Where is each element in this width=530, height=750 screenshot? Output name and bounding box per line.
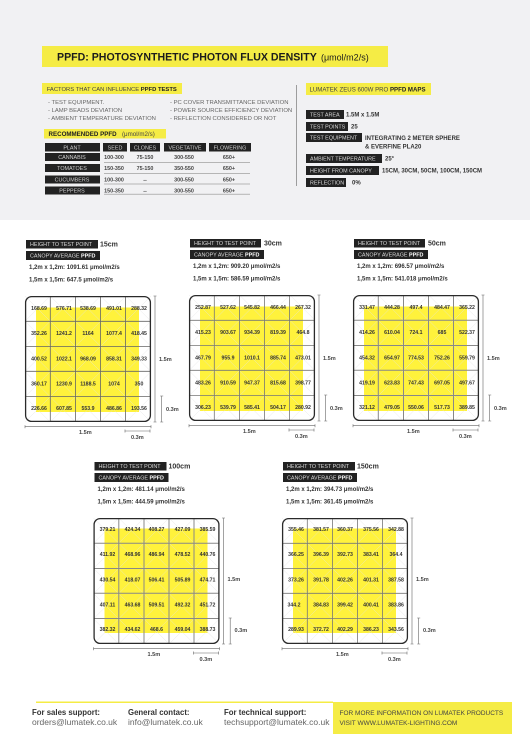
spec: test points [306,122,358,131]
table rows: PEPPERS [59,188,85,194]
title: (μmol/m2/s) [321,52,369,62]
table rows: 300-550 [174,188,194,194]
values: 478.52 [175,552,191,558]
text: averages [98,487,186,506]
values: 459.04 [175,627,191,633]
table rows: -- [143,177,147,183]
text: averages: 1,2m x 1,2m: 909.20 μmol/m2/s [193,264,281,270]
spec: test area: 1.5M x 1.5M [346,113,379,119]
values: 365.22 [459,305,475,311]
values: 331.47 [359,305,375,311]
values: 576.71 [56,306,72,312]
table rows: 350-550 [174,166,194,172]
label: height: HEIGHT TO TEST POINT [98,464,161,470]
values: 392.73 [337,552,353,558]
values: 1022.1 [56,356,72,362]
values: 1164 [82,331,94,337]
label: height [354,239,446,248]
values: 379.21 [100,527,116,533]
values: 267.32 [295,305,311,311]
table rows: 300-550 [174,177,194,183]
values: 444.28 [384,305,400,311]
label: height: 100cm [168,464,190,470]
values: 389.85 [459,405,475,411]
heat map grid [189,295,315,421]
values: 360.17 [31,382,47,388]
values: 424.34 [125,527,141,533]
label: height: HEIGHT TO TEST POINT [194,241,257,247]
table rows: CANNABIS [58,155,86,161]
values: 463.68 [125,602,141,608]
values: 193.56 [131,406,147,412]
dimensions: 1.5m [487,356,500,362]
values: 497.67 [459,380,475,386]
text: factors left: - LAMP BEADS DEVIATION [48,108,122,114]
panel: header background [0,0,530,220]
text: factors right: - REFLECTION CONSIDERED OR NOT [170,116,277,122]
values: 402.29 [337,627,353,633]
label: height: 50cm [428,240,446,248]
label: height: 150cm [357,464,379,470]
spec: test equipment [306,133,460,150]
values: 375.56 [363,527,379,533]
values: 466.44 [270,305,286,311]
dimensions: 1.5m [407,429,420,435]
values: 468.6 [150,627,163,633]
label: canopy average: CANOPY AVERAGE PPFD [30,254,96,260]
text: averages: 1,2m x 1,2m: 696.57 μmol/m2/s [357,264,445,270]
spec: reflection: REFLECTION [310,180,344,186]
text: factors left: - TEST EQUIPMENT. [48,100,104,106]
values: 1010.1 [244,356,260,362]
values: 440.76 [200,552,216,558]
label: height [190,239,282,248]
values: 553.9 [82,406,95,412]
values: 408.27 [149,527,165,533]
heading: factors: FACTORS THAT CAN INFLUENCE PPFD TESTS [47,87,177,93]
values: 414.26 [359,330,375,336]
values: 607.85 [56,406,72,412]
values: 747.43 [408,380,424,386]
dimensions: 1.5m [416,577,429,583]
table header: FLOWERING [214,145,246,151]
values: 473.01 [295,356,311,362]
heading: recommended [44,129,166,138]
values: 252.87 [195,305,211,311]
text: factors left: - AMBIENT TEMPERATURE DEVIATION [48,116,156,122]
heat map grid [94,518,220,644]
heat map grid [282,518,408,644]
values: 383.41 [363,552,379,558]
text: averages [286,487,374,506]
values: 1230.9 [56,382,72,388]
values: 288.32 [131,306,147,312]
values [288,527,404,633]
spec: test points: TEST POINTS [310,124,346,130]
values: 903.67 [220,330,236,336]
values: 947.37 [244,380,260,386]
values: 418.07 [125,578,141,584]
values: 387.58 [388,578,404,584]
panel: recommended PPFD [44,129,251,195]
values: 509.51 [149,602,165,608]
label: canopy average [26,251,100,260]
values [31,306,147,412]
spec: test points: 25 [351,125,358,131]
contact: general: General contact: [128,708,190,717]
panel: test specifications [296,83,482,187]
values: 968.09 [80,356,96,362]
label: canopy average: CANOPY AVERAGE PPFD [287,476,353,482]
table rows: 650+ [223,155,235,161]
values: 372.72 [313,627,329,633]
values: 388.73 [200,627,216,633]
values [100,527,216,633]
values: 366.25 [288,552,304,558]
spec: height from canopy: HEIGHT FROM CANOPY [310,168,372,174]
values: 486.86 [106,406,122,412]
panel: map 100cm [94,462,247,663]
text: averages: 1,2m x 1,2m: 1091.61 μmol/m2/s [29,265,120,271]
values: 819.39 [270,330,286,336]
dimensions: 0.3m [459,434,472,440]
values: 559.79 [459,356,475,362]
values: 1077.4 [106,331,122,337]
heading: factors [42,83,182,94]
dimensions: 1.5m [148,652,160,658]
label: canopy average [354,250,428,259]
label: canopy average: CANOPY AVERAGE PPFD [194,252,260,258]
values: 468.96 [125,552,141,558]
dimensions: 0.3m [166,407,179,413]
values: 539.79 [220,405,236,411]
table header [45,143,251,152]
values: 386.23 [363,627,379,633]
dimensions [282,518,436,663]
dimensions: 0.3m [494,406,507,412]
values: 752.26 [434,356,450,362]
values: 474.71 [200,578,216,584]
values: 934.39 [244,330,260,336]
label: height [283,462,379,470]
dimensions [189,295,343,440]
values: 467.79 [195,356,211,362]
dimensions [25,296,179,441]
dimensions: 0.3m [131,435,144,441]
heading: maps: LUMATEK ZEUS 600W PRO PPFD MAPS [310,86,426,94]
table rows: 75-150 [137,155,153,161]
values: 724.1 [410,330,423,336]
table rows: 150-350 [104,188,124,194]
spec: ambient temperature: 25° [385,157,395,163]
values: 401.31 [363,578,379,584]
values: 538.69 [80,306,96,312]
spec: height from canopy: 15CM, 30CM, 50CM, 100CM, 150CM [382,169,482,175]
values: 350 [135,382,143,388]
contact: sales: For sales support: [32,708,100,717]
label: height: HEIGHT TO TEST POINT [287,464,350,470]
text: averages: 1,5m x 1,5m: 541.018 μmol/m2/s [357,277,448,283]
values: 506.41 [149,578,165,584]
values: 451.72 [200,602,216,608]
heading: maps [306,83,431,95]
label: height: 15cm [100,242,118,248]
table rows: 650+ [223,188,235,194]
dimensions: 1.5m [79,430,92,436]
values: 522.37 [459,330,475,336]
values: 280.92 [295,405,311,411]
values: 226.66 [31,406,47,412]
table rows [45,153,250,195]
text: factors right [170,100,292,122]
dimensions: 0.3m [295,434,308,440]
values: 168.69 [31,306,47,312]
values: 505.89 [175,578,191,584]
values: 321.12 [359,405,375,411]
values: 398.77 [295,380,311,386]
table rows: 650+ [223,177,235,183]
values: 497.4 [410,305,423,311]
values: 352.26 [31,331,47,337]
table rows: 100-300 [104,155,124,161]
values: 360.37 [337,527,353,533]
contact: technical [224,708,330,727]
label: height: HEIGHT TO TEST POINT [30,242,93,248]
values: 419.19 [359,380,375,386]
label: height: HEIGHT TO TEST POINT [358,241,421,247]
dimensions [353,295,507,440]
text: factors left [48,100,156,122]
dimensions: 1.5m [323,356,336,362]
values: 517.73 [434,405,450,411]
panel: map 150cm [282,462,436,663]
label: canopy average [94,473,168,482]
table header: SEED [108,145,122,151]
values: 418.45 [131,331,147,337]
contact: general: info@lumatek.co.uk [128,717,204,727]
spec: height from canopy [306,166,482,175]
values: 885.74 [270,356,286,362]
values: 399.42 [337,602,353,608]
dimensions: 0.3m [200,657,212,663]
dimensions [94,518,247,663]
contact: technical: For technical support: [224,708,306,717]
label: canopy average [190,250,264,259]
values: 545.82 [244,305,260,311]
values: 382.32 [100,627,116,633]
values: 411.92 [100,552,115,558]
values: 1241.2 [56,331,72,337]
footer [32,702,512,734]
label: canopy average [283,473,357,482]
text: factors right: - POWER SOURCE EFFICIENCY DEVIATION [170,108,292,114]
values: 381.57 [313,527,329,533]
values: 342.88 [388,527,404,533]
values: 344.2 [288,602,301,608]
spec: reflection [306,178,361,187]
values: 486.94 [149,552,165,558]
table rows: TOMATOES [57,166,87,172]
values: 306.23 [195,405,211,411]
spec: test equipment: & EVERFINE PLA20 [365,144,422,150]
values [359,305,475,411]
text: factors right: - PC COVER TRANSMITTANCE DEVIATION [170,100,288,106]
title: PPFD: PHOTOSYNTHETIC PHOTON FLUX DENSITY [57,52,317,64]
text: averages: 1,5m x 1,5m: 647.5 μmol/m2/s [29,278,114,284]
spec: ambient temperature: AMBIENT TEMPERATURE [310,156,376,162]
values: 434.62 [125,627,141,633]
panel: map 30cm [189,239,343,440]
values: 396.39 [313,552,329,558]
heat map grid [25,296,151,422]
table rows: CUCUMBERS [55,177,90,183]
spec: test area: TEST AREA [310,112,340,118]
table header: CLONES [134,145,156,151]
values: 1074 [108,382,120,388]
values: 483.26 [195,380,211,386]
values: 550.06 [408,405,424,411]
contact: technical: techsupport@lumatek.co.uk [224,717,330,727]
table rows: -- [143,188,147,194]
values: 610.04 [384,330,400,336]
values: 289.93 [288,627,304,633]
values: 479.05 [384,405,400,411]
title [42,46,388,67]
values: 685 [438,330,446,336]
table header: PLANT [63,145,81,151]
values: 383.86 [388,602,404,608]
values: 454.32 [359,356,375,362]
dimensions: 1.5m [159,357,172,363]
table rows: 650+ [223,166,235,172]
values: 910.59 [220,380,236,386]
values: 492.32 [175,602,191,608]
callout: more information [333,702,512,734]
values: 415.23 [195,330,211,336]
values: 623.83 [384,380,400,386]
panel: map 15cm [25,240,179,441]
values [195,305,311,411]
table header: VEGETATIVE [168,145,202,151]
panel: factors [42,83,292,122]
label: canopy average: CANOPY AVERAGE PPFD [98,476,164,482]
values: 858.31 [106,356,122,362]
dimensions: 1.5m [228,577,240,583]
values: 504.17 [270,405,286,411]
values: 364.4 [390,552,403,558]
values: 774.53 [408,356,424,362]
label: height [26,240,118,248]
contact: general [128,708,204,727]
dimensions: 0.3m [234,628,247,634]
panel: map 50cm [353,239,507,440]
spec: reflection: 0% [352,181,361,187]
spec: test equipment: TEST EQUIPMENT [310,136,358,142]
label: height [94,462,190,470]
text: averages: 1,2m x 1,2m: 394.73 μmol/m2/s [286,487,374,493]
dimensions: 1.5m [243,429,256,435]
table rows: 100-300 [104,177,124,183]
values: 491.01 [106,306,122,312]
spec: test area [306,110,379,119]
values: 697.05 [434,380,450,386]
heading: recommended: (μmol/m2/s) [122,131,155,138]
values: 654.97 [384,356,400,362]
heading: recommended: RECOMMENDED PPFD [48,131,117,138]
text: averages [357,264,448,283]
values: 400.41 [363,602,379,608]
values: 349.33 [131,356,147,362]
text: averages: 1,5m x 1,5m: 361.45 μmol/m2/s [286,500,374,506]
dimensions: 0.3m [423,628,436,634]
callout: more information: FOR MORE INFORMATION ON LUMATEK PRODUCTS [340,710,504,717]
values: 373.26 [288,578,304,584]
dimensions: 1.5m [336,652,349,658]
values: 402.26 [337,578,353,584]
values: 815.68 [270,380,286,386]
values: 527.62 [220,305,236,311]
table rows: 300-550 [174,155,194,161]
table rows: 75-150 [137,166,153,172]
text: averages [29,265,120,284]
values: 407.11 [100,602,115,608]
dimensions: 0.3m [330,406,343,412]
values: 955.9 [222,356,235,362]
values: 430.54 [100,578,116,584]
text: averages [193,264,281,283]
values: 391.78 [313,578,329,584]
values: 400.52 [31,356,47,362]
values: 585.41 [244,405,260,411]
values: 384.83 [313,602,329,608]
label: height: 30cm [264,240,282,248]
values: 1188.5 [80,382,96,388]
values: 343.56 [388,627,404,633]
values: 427.09 [175,527,191,533]
text: averages: 1,2m x 1,2m: 481.14 μmol/m2/s [98,487,186,493]
label: canopy average: CANOPY AVERAGE PPFD [358,252,424,258]
values: 484.47 [434,305,450,311]
table rows: 150-350 [104,166,124,172]
text: averages: 1,5m x 1,5m: 586.59 μmol/m2/s [193,277,281,283]
callout: more information: VISIT WWW.LUMATEK-LIGHTING.COM [340,720,457,727]
values: 355.46 [288,527,304,533]
contact: sales: orders@lumatek.co.uk [32,717,118,727]
heat map grid [353,295,479,421]
dimensions: 0.3m [388,657,401,663]
contact: sales [32,708,118,727]
values: 385.59 [200,527,216,533]
values: 464.8 [297,330,310,336]
spec: test equipment: INTEGRATING 2 METER SPHERE [365,136,460,142]
spec: ambient temperature [306,154,395,163]
text: averages: 1,5m x 1,5m: 444.59 μmol/m2/s [98,500,186,506]
